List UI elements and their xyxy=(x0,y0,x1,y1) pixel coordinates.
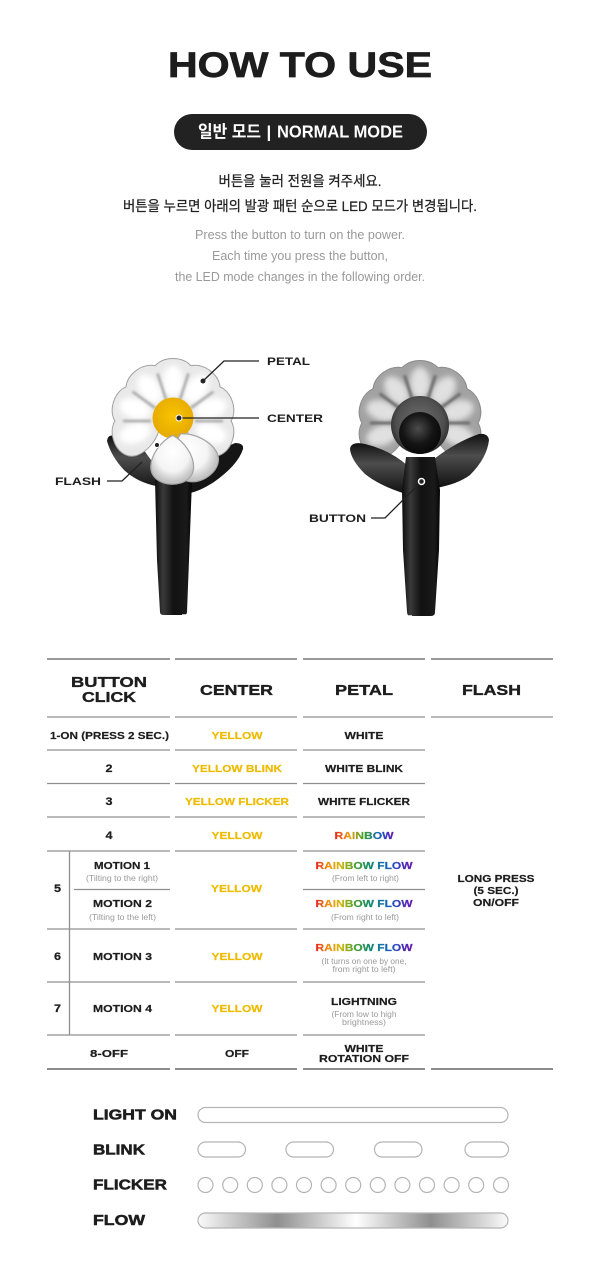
center column xyxy=(185,731,290,1060)
light stick back view xyxy=(350,360,489,616)
english instructions: Each time you press the button, xyxy=(212,248,388,263)
petal column: from right to left) xyxy=(332,965,396,974)
petal column: (It turns on one by one, xyxy=(322,957,406,966)
mode badge: NORMAL MODE xyxy=(277,122,403,142)
korean instructions: 버튼을 누르면 아래의 발광 패턴 순으로 LED 모드가 변경됩니다. xyxy=(123,198,477,214)
flash column xyxy=(458,874,535,909)
petal column: RAINBOW FLOW xyxy=(316,899,413,910)
legend: light on: LIGHT ON xyxy=(93,1108,177,1124)
back handle xyxy=(402,457,440,616)
button click column: 2 xyxy=(106,763,112,775)
table header: CLICK xyxy=(82,690,137,706)
table header: CENTER xyxy=(200,683,274,699)
button click column: 5 xyxy=(54,883,61,895)
button click column: 4 xyxy=(106,830,114,842)
mode badge: 일반 모드 xyxy=(198,122,261,142)
table header: FLASH xyxy=(462,683,521,699)
petal column: RAINBOW FLOW xyxy=(316,861,413,872)
button click column: (Tilting to the left) xyxy=(89,913,156,922)
legend: light on xyxy=(93,1108,508,1124)
button click column: MOTION 3 xyxy=(93,952,153,963)
center column: YELLOW BLINK xyxy=(192,764,283,775)
button click column: 8-OFF xyxy=(90,1049,128,1060)
title: HOW TO USE xyxy=(168,46,432,85)
mode badge xyxy=(174,114,427,150)
petal column: WHITE FLICKER xyxy=(318,797,411,808)
legend: flicker xyxy=(93,1178,508,1194)
petal column: LIGHTNING xyxy=(331,997,397,1008)
petal column: ROTATION OFF xyxy=(319,1054,409,1065)
callout: center: CENTER xyxy=(267,413,323,425)
english instructions: the LED mode changes in the following order. xyxy=(175,269,425,284)
center column: YELLOW xyxy=(211,884,263,895)
petal column: WHITE BLINK xyxy=(325,764,404,775)
center column: OFF xyxy=(225,1049,249,1060)
back arms xyxy=(350,443,408,494)
callout: petal: PETAL xyxy=(267,356,310,368)
table grid xyxy=(47,659,553,1069)
english instructions xyxy=(175,227,425,284)
legend: flow: FLOW xyxy=(93,1213,145,1229)
front lower petals xyxy=(150,423,225,489)
flash column: ON/OFF xyxy=(473,898,519,909)
callout: button: BUTTON xyxy=(309,513,366,525)
petal column: (From right to left) xyxy=(331,913,399,922)
back petals xyxy=(355,360,485,462)
yellow center xyxy=(152,398,194,438)
table header xyxy=(71,675,521,706)
legend: blink: BLINK xyxy=(93,1142,146,1158)
flash column: LONG PRESS xyxy=(458,874,535,885)
callout: button xyxy=(309,484,419,525)
button click column: MOTION 2 xyxy=(93,899,153,910)
callout: petal xyxy=(200,356,310,384)
callout: flash: FLASH xyxy=(55,476,101,488)
center column: YELLOW xyxy=(212,831,263,842)
legend: blink xyxy=(93,1142,508,1158)
button click column: 1-ON (PRESS 2 SEC.) xyxy=(50,731,169,742)
center column: YELLOW xyxy=(212,952,263,963)
petal column: RAINBOW xyxy=(334,831,394,842)
legend: flow xyxy=(93,1213,508,1229)
button click column: (Tilting to the right) xyxy=(86,874,158,883)
button dot xyxy=(418,478,424,484)
button click column: 7 xyxy=(54,1003,61,1015)
center column: YELLOW xyxy=(212,1004,263,1015)
korean instructions xyxy=(123,173,477,214)
button click column: MOTION 4 xyxy=(93,1004,153,1015)
petal column: (From low to high xyxy=(332,1010,396,1019)
handle xyxy=(155,480,192,615)
petals xyxy=(108,358,238,460)
center column: YELLOW xyxy=(212,731,263,742)
petal column xyxy=(316,731,413,1065)
petal column: RAINBOW FLOW xyxy=(316,943,413,954)
callout: flash xyxy=(55,442,160,488)
center column: YELLOW FLICKER xyxy=(185,797,290,808)
button click column xyxy=(50,731,169,1060)
button click column: MOTION 1 xyxy=(94,861,150,872)
korean instructions: 버튼을 눌러 전원을 켜주세요. xyxy=(218,173,382,189)
legend: flicker: FLICKER xyxy=(93,1178,168,1194)
flash column: (5 SEC.) xyxy=(474,886,518,897)
english instructions: Press the button to turn on the power. xyxy=(195,227,405,242)
button click column: 3 xyxy=(106,796,112,808)
arms xyxy=(107,436,172,490)
petal column: WHITE xyxy=(344,1044,384,1055)
petal column: brightness) xyxy=(342,1018,386,1027)
table header: BUTTON xyxy=(71,675,147,691)
back center xyxy=(391,396,449,454)
button click column: 6 xyxy=(54,951,61,963)
petal column: (From left to right) xyxy=(332,874,399,883)
table header: PETAL xyxy=(335,683,393,699)
light stick front view xyxy=(107,358,243,615)
callout: center xyxy=(176,413,323,425)
petal column: WHITE xyxy=(344,731,384,742)
white flash xyxy=(143,440,162,460)
mode badge: | xyxy=(266,122,271,142)
